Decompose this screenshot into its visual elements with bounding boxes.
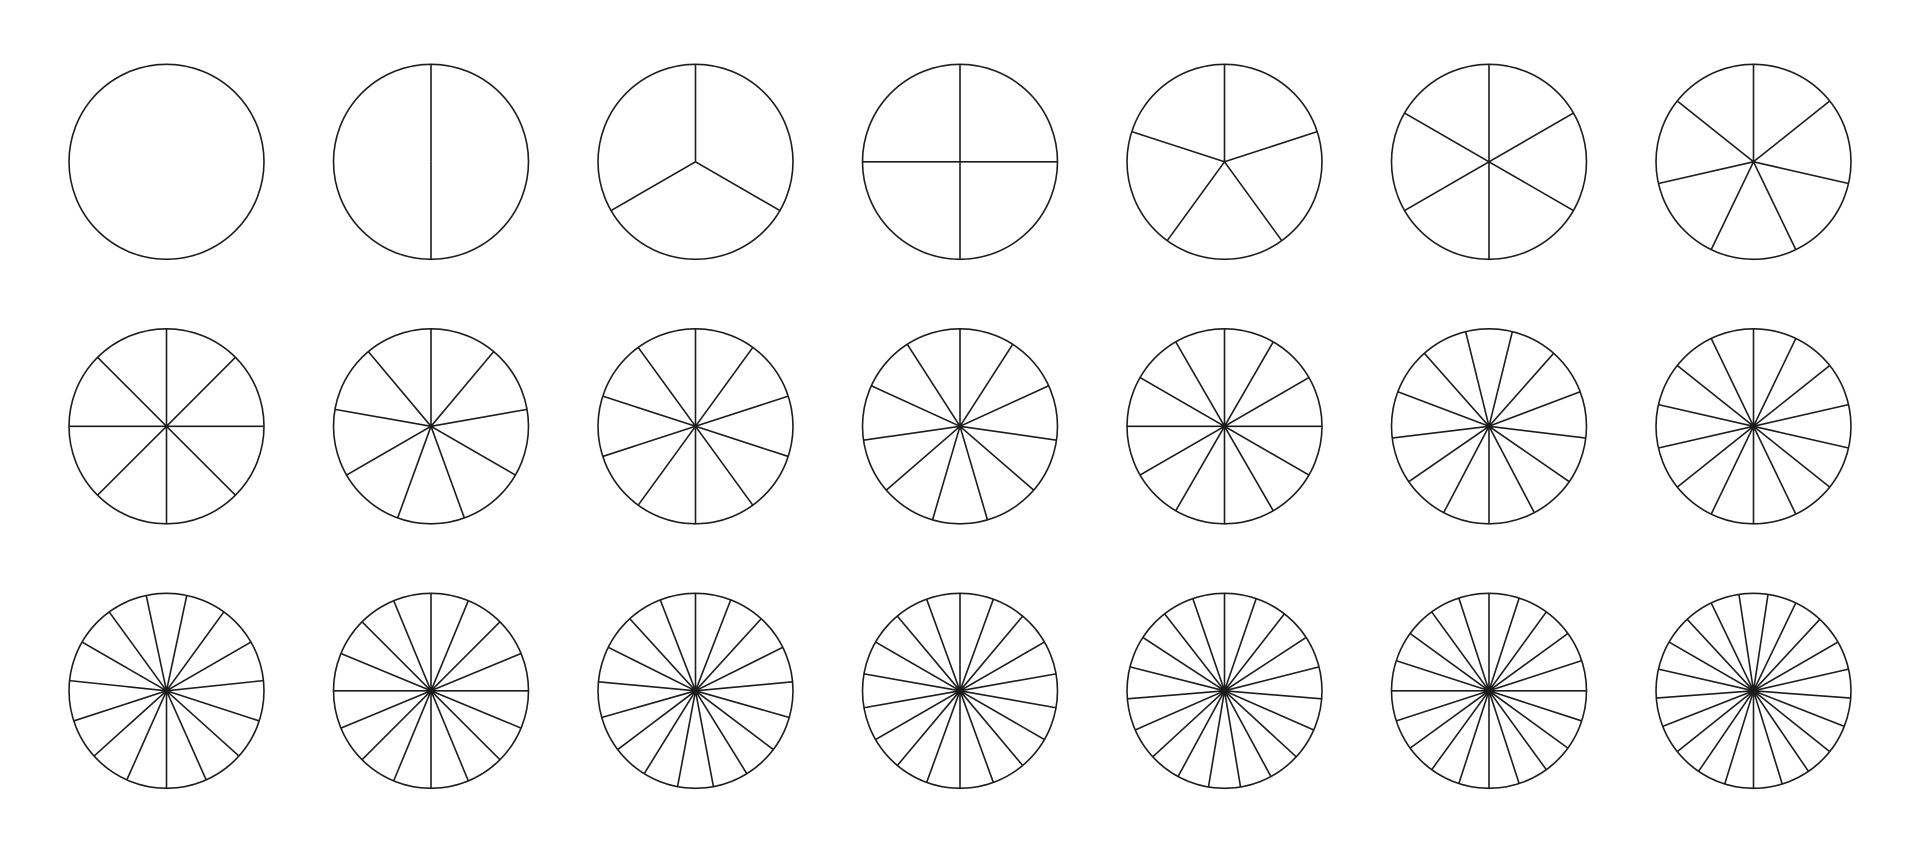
pie: 19 segments <box>1127 593 1322 788</box>
pie: 1 segment <box>69 64 264 259</box>
pie: 2 segments <box>334 64 528 259</box>
pie: 6 segments <box>1392 64 1586 259</box>
pie: 12 segments <box>1127 329 1322 524</box>
pie: 11 segments <box>862 329 1058 524</box>
pie: 3 segments <box>598 64 793 259</box>
pie: 4 segments <box>862 64 1058 259</box>
pie: 18 segments <box>862 593 1058 788</box>
pie: 9 segments <box>334 329 528 524</box>
pie: 17 segments <box>598 593 793 788</box>
pie: 13 segments <box>1392 329 1586 524</box>
pie: 8 segments <box>69 329 264 524</box>
pie: 21 segments <box>1656 593 1851 788</box>
pie: 20 segments <box>1392 593 1586 788</box>
pie: 7 segments <box>1656 64 1851 259</box>
pie: 16 segments <box>334 593 528 788</box>
pie: 15 segments <box>69 593 264 788</box>
pie: 10 segments <box>598 329 793 524</box>
pie: 14 segments <box>1656 329 1851 524</box>
pie: 5 segments <box>1127 64 1322 259</box>
